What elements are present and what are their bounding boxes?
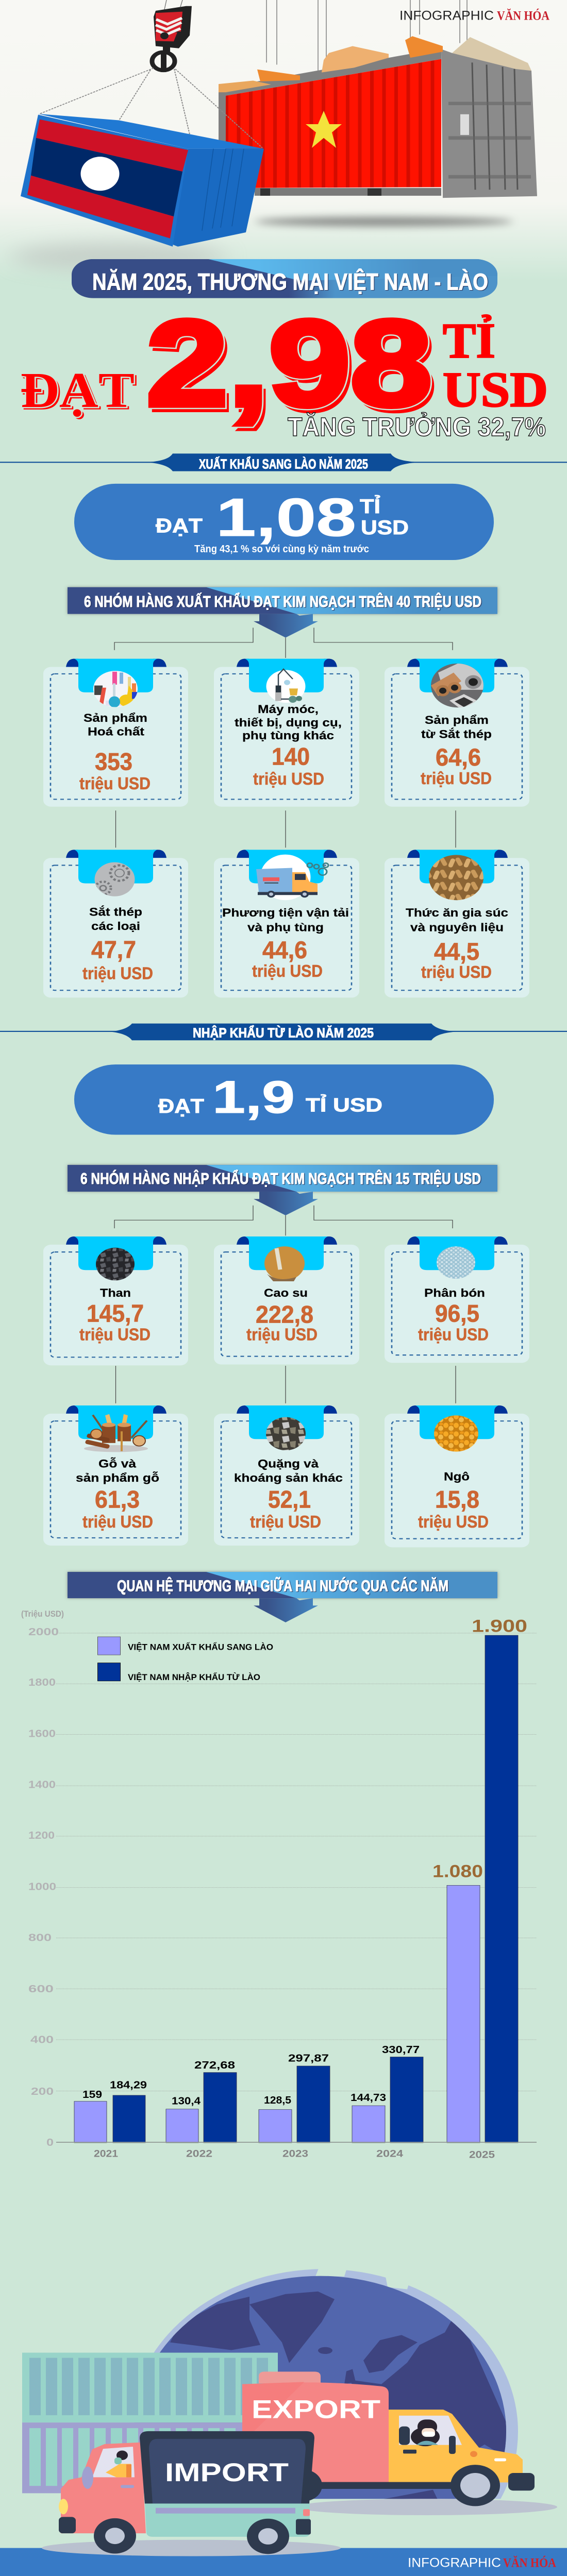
icon: machinery xyxy=(266,669,305,703)
title pill xyxy=(72,259,497,298)
card: corn xyxy=(385,1405,529,1547)
card: coal: Than xyxy=(100,1286,131,1300)
crane ropes xyxy=(164,0,467,73)
card: animal feed xyxy=(385,850,529,997)
heading banner: 6 export groups xyxy=(68,587,497,638)
y axis labels: 200 xyxy=(31,2086,54,2097)
unit USD: USD xyxy=(443,362,548,417)
card: chemicals: triệu USD xyxy=(79,774,151,793)
card: rubber: 222,8 xyxy=(256,1301,313,1328)
logo: Infographic Văn Hóa bottom: INFOGRAPHIC xyxy=(408,2555,501,2570)
y axis labels: 1000 xyxy=(28,1880,56,1892)
y axis labels: 1600 xyxy=(28,1727,56,1739)
export total pill: ĐẠT xyxy=(156,515,203,537)
year labels: 2024 xyxy=(376,2148,403,2159)
card: wood xyxy=(43,1405,188,1546)
section banner: import xyxy=(0,1024,567,1041)
card: iron and steel xyxy=(43,850,188,997)
y axis labels: 1400 xyxy=(28,1778,56,1790)
bar value labels: 130,4 xyxy=(172,2095,201,2107)
bars 2025 xyxy=(447,1635,518,2143)
y axis labels: 1200 xyxy=(28,1829,55,1841)
bar value labels: 1.080 xyxy=(432,1862,483,1882)
card: machinery xyxy=(214,659,359,807)
card: steel products: triệu USD xyxy=(421,769,492,788)
card: animal feed: 44,5 xyxy=(434,938,479,965)
import total pill: 1,9 xyxy=(212,1071,295,1123)
card: rubber: Cao su xyxy=(264,1286,308,1300)
card: steel products xyxy=(385,659,529,807)
export total pill: USD xyxy=(361,516,409,538)
card: animal feed: triệu USD xyxy=(421,962,492,981)
icon: truck xyxy=(256,855,328,900)
bar value labels: 272,68 xyxy=(194,2059,235,2071)
card: iron and steel: 47,7 xyxy=(91,936,136,963)
icon: ore xyxy=(266,1417,306,1450)
container: Laos flag xyxy=(21,114,264,247)
illustration: import truck xyxy=(42,2431,341,2556)
card: steel products: 64,6 xyxy=(436,744,481,771)
card: wood: 61,3 xyxy=(95,1486,140,1513)
card: ores: Quặng và xyxy=(258,1458,319,1470)
import total pill: ĐẠT xyxy=(158,1095,204,1117)
big figure 2,98: 2,98 xyxy=(146,295,432,431)
year labels: 2022 xyxy=(186,2148,212,2159)
word Đạt: ĐẠT xyxy=(22,365,137,420)
year labels xyxy=(94,2148,495,2160)
import total pill: TỈ USD xyxy=(306,1094,382,1115)
y axis labels: 800 xyxy=(28,1931,52,1943)
card: transport vehicles: Phương tiện vận tải xyxy=(222,906,349,920)
connector lines: import xyxy=(114,1206,456,1403)
card: ores: triệu USD xyxy=(250,1512,321,1531)
bar value labels: 184,29 xyxy=(110,2079,147,2091)
card: iron and steel: Sắt thép xyxy=(89,905,142,919)
card: machinery: phụ tùng khác xyxy=(242,729,334,742)
bar value labels: 128,5 xyxy=(264,2094,291,2106)
card: transport vehicles: và phụ tùng xyxy=(247,921,324,934)
hero illustration: containers lifted by crane xyxy=(10,0,537,270)
icon: corn kernels xyxy=(434,1415,478,1452)
bars 2021 xyxy=(74,2095,145,2143)
card: ores: khoáng sản khác xyxy=(234,1471,343,1485)
card: animal feed: và nguyên liệu xyxy=(410,921,504,934)
export total pill xyxy=(74,484,494,560)
driver: import truck xyxy=(106,2450,131,2477)
card: transport vehicles: triệu USD xyxy=(252,961,323,980)
chart unit: (Triệu USD) xyxy=(21,1609,64,1619)
legend: VIỆT NAM NHẬP KHẨU TỪ LÀO xyxy=(128,1672,260,1682)
illustration: stacked containers xyxy=(22,2353,278,2493)
bars 2023 xyxy=(259,2066,330,2143)
card: steel products: Sản phẩm xyxy=(425,714,489,726)
illustration: import truck: IMPORT xyxy=(165,2458,289,2487)
card: fertilizer: triệu USD xyxy=(418,1325,489,1344)
section banner: export: XUẤT KHẨU SANG LÀO NĂM 2025 xyxy=(199,456,368,472)
legend: VIỆT NAM XUẤT KHẨU SANG LÀO xyxy=(128,1642,273,1652)
bar value labels: 1.900 xyxy=(472,1616,527,1636)
card: corn: 15,8 xyxy=(435,1486,479,1513)
card: rubber: triệu USD xyxy=(246,1325,318,1344)
card: machinery: 140 xyxy=(272,743,310,770)
card: corn: triệu USD xyxy=(418,1512,489,1531)
card: rubber xyxy=(214,1236,359,1365)
legend xyxy=(98,1637,273,1682)
card: steel products: từ Sắt thép xyxy=(421,727,492,741)
icon: gears xyxy=(95,862,135,896)
card: animal feed: Thức ăn gia súc xyxy=(406,906,508,920)
section banner: import: NHẬP KHẨU TỪ LÀO NĂM 2025 xyxy=(193,1025,374,1041)
export total pill: TỈ xyxy=(360,495,380,517)
card: chemicals: Hoá chất xyxy=(88,725,144,738)
word Đạt: ĐẠT xyxy=(20,363,135,418)
heading banner: 6 import groups xyxy=(68,1165,497,1215)
footer bar xyxy=(0,2548,567,2576)
logo: Infographic Văn Hóa top: INFOGRAPHIC xyxy=(399,8,494,23)
card: wood: sản phẩm gỗ xyxy=(76,1470,159,1485)
card: chemicals: Sản phẩm xyxy=(84,711,147,724)
bar value labels: 297,87 xyxy=(288,2053,329,2064)
card: machinery: triệu USD xyxy=(253,769,324,788)
section banner: export xyxy=(0,453,567,472)
card: coal: triệu USD xyxy=(79,1325,151,1344)
icon: logs xyxy=(84,1414,148,1452)
card: chemicals xyxy=(43,659,188,807)
y axis labels: 400 xyxy=(30,2034,54,2045)
y axis labels xyxy=(28,1626,59,2148)
headline: đạt 2,98 tỉ USD xyxy=(20,295,548,436)
heading banner: trade relations xyxy=(68,1572,497,1622)
card: machinery: thiết bị, dụng cụ, xyxy=(235,716,342,729)
icon: coal xyxy=(96,1248,135,1280)
import total pill xyxy=(74,1064,494,1135)
chains xyxy=(40,68,262,148)
card: machinery: Máy móc, xyxy=(258,703,319,716)
driver: export truck xyxy=(399,2419,440,2446)
bar chart: trade by year xyxy=(21,1609,537,2160)
card: iron and steel: các loại xyxy=(91,920,140,933)
y axis labels: 600 xyxy=(28,1983,54,1994)
y axis labels: 2000 xyxy=(28,1626,59,1638)
card: fertilizer xyxy=(385,1236,529,1363)
unit tỉ: TỈ xyxy=(443,313,495,368)
y axis labels: 0 xyxy=(46,2137,54,2148)
bar value labels: 144,73 xyxy=(351,2092,386,2103)
y axis labels: 1800 xyxy=(28,1676,56,1688)
card: corn: Ngô xyxy=(444,1470,470,1483)
icon: chemical flasks xyxy=(93,671,138,707)
bar value labels: 159 xyxy=(82,2089,102,2100)
icon: steel pipes xyxy=(431,664,483,708)
card: transport vehicles xyxy=(214,850,359,997)
bar value labels: 330,77 xyxy=(382,2044,420,2055)
icon: rubber block xyxy=(264,1246,305,1281)
year labels: 2021 xyxy=(94,2148,118,2159)
card: iron and steel: triệu USD xyxy=(82,963,153,983)
illustration: export truck xyxy=(242,2371,557,2515)
card: ores xyxy=(214,1405,359,1546)
year labels: 2025 xyxy=(469,2149,495,2160)
bars 2024 xyxy=(352,2057,423,2143)
icon: feed pellets xyxy=(429,855,483,900)
card: coal: 145,7 xyxy=(87,1300,144,1327)
bars 2022 xyxy=(166,2073,237,2143)
card: wood: Gỗ và xyxy=(98,1456,136,1470)
illustration: export truck: EXPORT xyxy=(252,2395,380,2424)
bar value labels xyxy=(82,1616,527,2107)
crane hook xyxy=(152,6,192,70)
card: fertilizer: 96,5 xyxy=(435,1300,479,1327)
card: coal xyxy=(43,1236,188,1365)
export total pill: Tăng 43,1 % so với cùng kỳ năm trước xyxy=(194,543,369,555)
year labels: 2023 xyxy=(282,2148,308,2159)
card: ores: 52,1 xyxy=(268,1486,311,1513)
big figure 2,98: 2,98 xyxy=(150,300,436,436)
connector lines: export xyxy=(114,628,456,848)
container: Vietnam flag xyxy=(219,36,537,198)
icon: fertilizer granules xyxy=(437,1246,475,1279)
card: wood: triệu USD xyxy=(82,1512,153,1531)
illustration: globe xyxy=(134,2269,518,2499)
card: fertilizer: Phân bón xyxy=(424,1286,485,1300)
export total pill: 1,08 xyxy=(216,488,356,548)
card: chemicals: 353 xyxy=(95,748,132,775)
card: transport vehicles: 44,6 xyxy=(262,937,307,963)
big figure 2,98: 2,98 xyxy=(146,295,432,431)
